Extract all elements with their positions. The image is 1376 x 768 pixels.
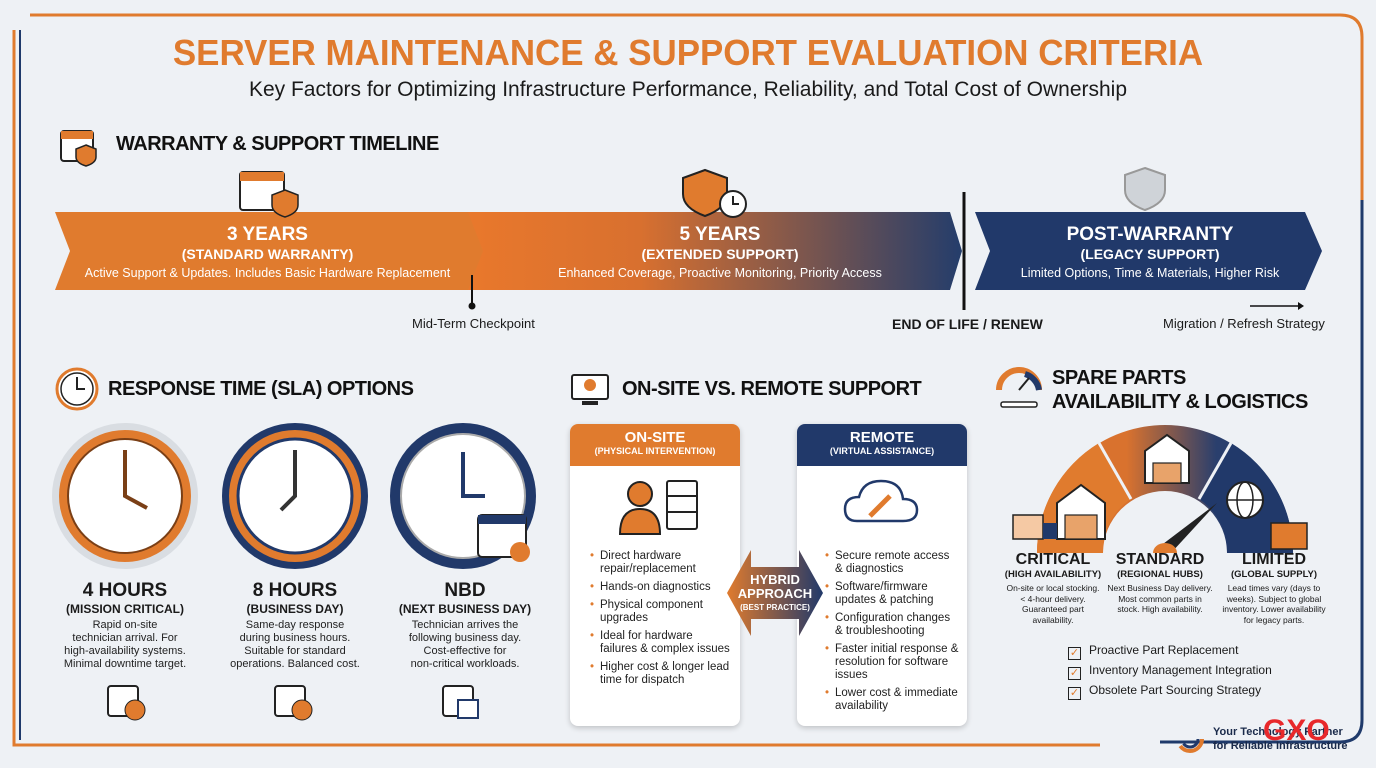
sla text: 4 hours: Minimal downtime target. (64, 658, 186, 670)
footer logo: for Reliable Infrastructure (1213, 740, 1347, 752)
sla text: 4 hours (64, 580, 186, 670)
sla text: 4 hours: high-availability systems. (64, 645, 186, 657)
hybrid arrow: APPROACH (738, 586, 812, 601)
spare: limited: weeks). Subject to global (1227, 594, 1321, 604)
heading: spare parts: SPARE PARTS (1052, 367, 1186, 389)
card: remote: REMOTE (850, 429, 914, 446)
spare: critical (1005, 551, 1101, 624)
sla text: 8 hours: during business hours. (240, 632, 350, 644)
spare: standard: Next Business Day delivery. (1107, 583, 1213, 593)
heading: onsite vs remote: ON-SITE VS. REMOTE SUPPORT (622, 378, 921, 400)
checklist: ✓ (1070, 667, 1079, 679)
spare: standard: Most common parts in (1118, 594, 1202, 604)
card: remote (797, 424, 967, 726)
sla text: 8 hours: Same-day response (246, 619, 344, 631)
sla text: 8 hours: operations. Balanced cost. (230, 658, 360, 670)
sla text: NBD: following business day. (409, 632, 521, 644)
card: remote: Software/firmware updates & patching (835, 581, 933, 606)
spare: limited (1222, 551, 1326, 624)
hybrid arrow: HYBRID (750, 572, 800, 587)
heading: SLA: RESPONSE TIME (SLA) OPTIONS (108, 378, 413, 400)
timeline band (55, 167, 1322, 310)
segment text: post warranty: POST-WARRANTY (1067, 224, 1233, 245)
card: onsite: Higher cost & longer lead time for dispatch (600, 661, 729, 686)
spare: critical: CRITICAL (1016, 551, 1090, 568)
spare: limited: inventory. Lower availability (1222, 604, 1326, 614)
heading: onsite vs remote (571, 374, 922, 405)
segment text: 5 years: (EXTENDED SUPPORT) (641, 246, 799, 262)
sla text: 4 hours: technician arrival. For (72, 632, 178, 644)
card: remote: Secure remote access & diagnostics (835, 550, 949, 575)
heading: SLA (56, 368, 414, 410)
checklist: Inventory Management Integration (1089, 663, 1272, 677)
footer logo: Your Technology Partner (1213, 726, 1343, 738)
segment text: 5 years: Enhanced Coverage, Proactive Monitoring, Priority Access (558, 266, 882, 280)
heading: spare parts: AVAILABILITY & LOGISTICS (1052, 391, 1308, 413)
spare: critical: availability. (1033, 614, 1073, 624)
card: onsite: ON-SITE (625, 429, 685, 446)
checklist: ✓ (1070, 687, 1079, 699)
card: onsite: Direct hardware repair/replacement (600, 550, 696, 575)
card: remote: Faster initial response & resolution for software issues (835, 643, 958, 681)
card: remote: (VIRTUAL ASSISTANCE) (830, 446, 934, 456)
segment text: 5 years: 5 YEARS (680, 224, 760, 245)
checklist: ✓ (1070, 647, 1079, 659)
spare: standard: stock. High availability. (1117, 604, 1203, 614)
spare: standard: (REGIONAL HUBS) (1117, 569, 1203, 580)
sla text: 8 hours (230, 580, 360, 670)
hybrid arrow: (BEST PRACTICE) (740, 603, 810, 612)
sla text: NBD (399, 580, 531, 670)
checklist (1068, 643, 1272, 700)
card: remote: Lower cost & immediate availability (835, 687, 958, 712)
segment text: post warranty (1021, 224, 1280, 280)
segment text: 3 years (84, 224, 450, 280)
subtitle: Key Factors for Optimizing Infrastructure Performance, Reliability, and Total Cost of Ownership (249, 78, 1127, 101)
text: END OF LIFE / RENEW (892, 316, 1043, 332)
spare: critical: Guaranteed part (1022, 604, 1084, 614)
sla text: NBD: Technician arrives the (412, 619, 518, 631)
sla text: 8 hours: 8 HOURS (253, 580, 337, 601)
segment text: 3 years: Active Support & Updates. Includes Basic Hardware Replacement (85, 266, 450, 280)
sla text: NBD: NBD (444, 580, 486, 601)
card: onsite: Physical component upgrades (600, 599, 703, 624)
card: onsite: (PHYSICAL INTERVENTION) (595, 446, 715, 456)
spare: standard: STANDARD (1116, 551, 1204, 568)
spare: critical: On-site or local stocking. (1006, 583, 1100, 593)
checklist: Proactive Part Replacement (1089, 643, 1238, 657)
clocks (52, 423, 536, 720)
spare: critical: < 4-hour delivery. (1020, 594, 1086, 604)
hybrid arrow (727, 550, 823, 636)
spare: limited: Lead times vary (days to (1228, 583, 1320, 593)
sla text: NBD: (NEXT BUSINESS DAY) (399, 602, 531, 616)
card: remote: Configuration changes & troubleshooting (835, 612, 950, 637)
heading: warranty timeline: WARRANTY & SUPPORT TIMELINE (116, 133, 439, 155)
card: onsite: Hands-on diagnostics (600, 581, 711, 593)
sla text: 8 hours: Suitable for standard (244, 645, 346, 657)
text: Migration / Refresh Strategy (1163, 316, 1325, 331)
checklist: Obsolete Part Sourcing Strategy (1089, 683, 1261, 697)
title: SERVER MAINTENANCE & SUPPORT EVALUATION CRITERIA (173, 32, 1203, 73)
gauge (1012, 425, 1308, 553)
segment text: post warranty: (LEGACY SUPPORT) (1080, 246, 1219, 262)
segment text: 5 years (558, 224, 882, 280)
spare: critical: (HIGH AVAILABILITY) (1005, 569, 1101, 580)
heading: spare parts (996, 367, 1308, 413)
heading: warranty timeline (60, 130, 439, 167)
spare: limited: (GLOBAL SUPPLY) (1231, 569, 1317, 580)
footer logo: GXO (1263, 714, 1330, 747)
sla text: 4 hours: Rapid on-site (93, 619, 157, 631)
footer logo (1178, 714, 1348, 753)
milestone labels: Mid-Term Checkpoint (412, 316, 535, 331)
sla text: NBD: non-critical workloads. (411, 658, 519, 670)
sla text: 4 hours: (MISSION CRITICAL) (66, 602, 184, 616)
spare: limited: for legacy parts. (1244, 614, 1304, 624)
segment text: 3 years: 3 YEARS (227, 224, 308, 245)
card: onsite: Ideal for hardware failures & complex issues (600, 630, 730, 655)
card: onsite (570, 424, 740, 726)
sla text: NBD: Cost-effective for (424, 645, 506, 657)
spare: standard (1107, 551, 1213, 614)
sla text: 8 hours: (BUSINESS DAY) (247, 602, 343, 616)
segment text: post warranty: Limited Options, Time & Materials, Higher Risk (1021, 266, 1279, 280)
spare: limited: LIMITED (1242, 551, 1306, 568)
segment text: 3 years: (STANDARD WARRANTY) (182, 246, 353, 262)
sla text: 4 hours: 4 HOURS (83, 580, 167, 601)
